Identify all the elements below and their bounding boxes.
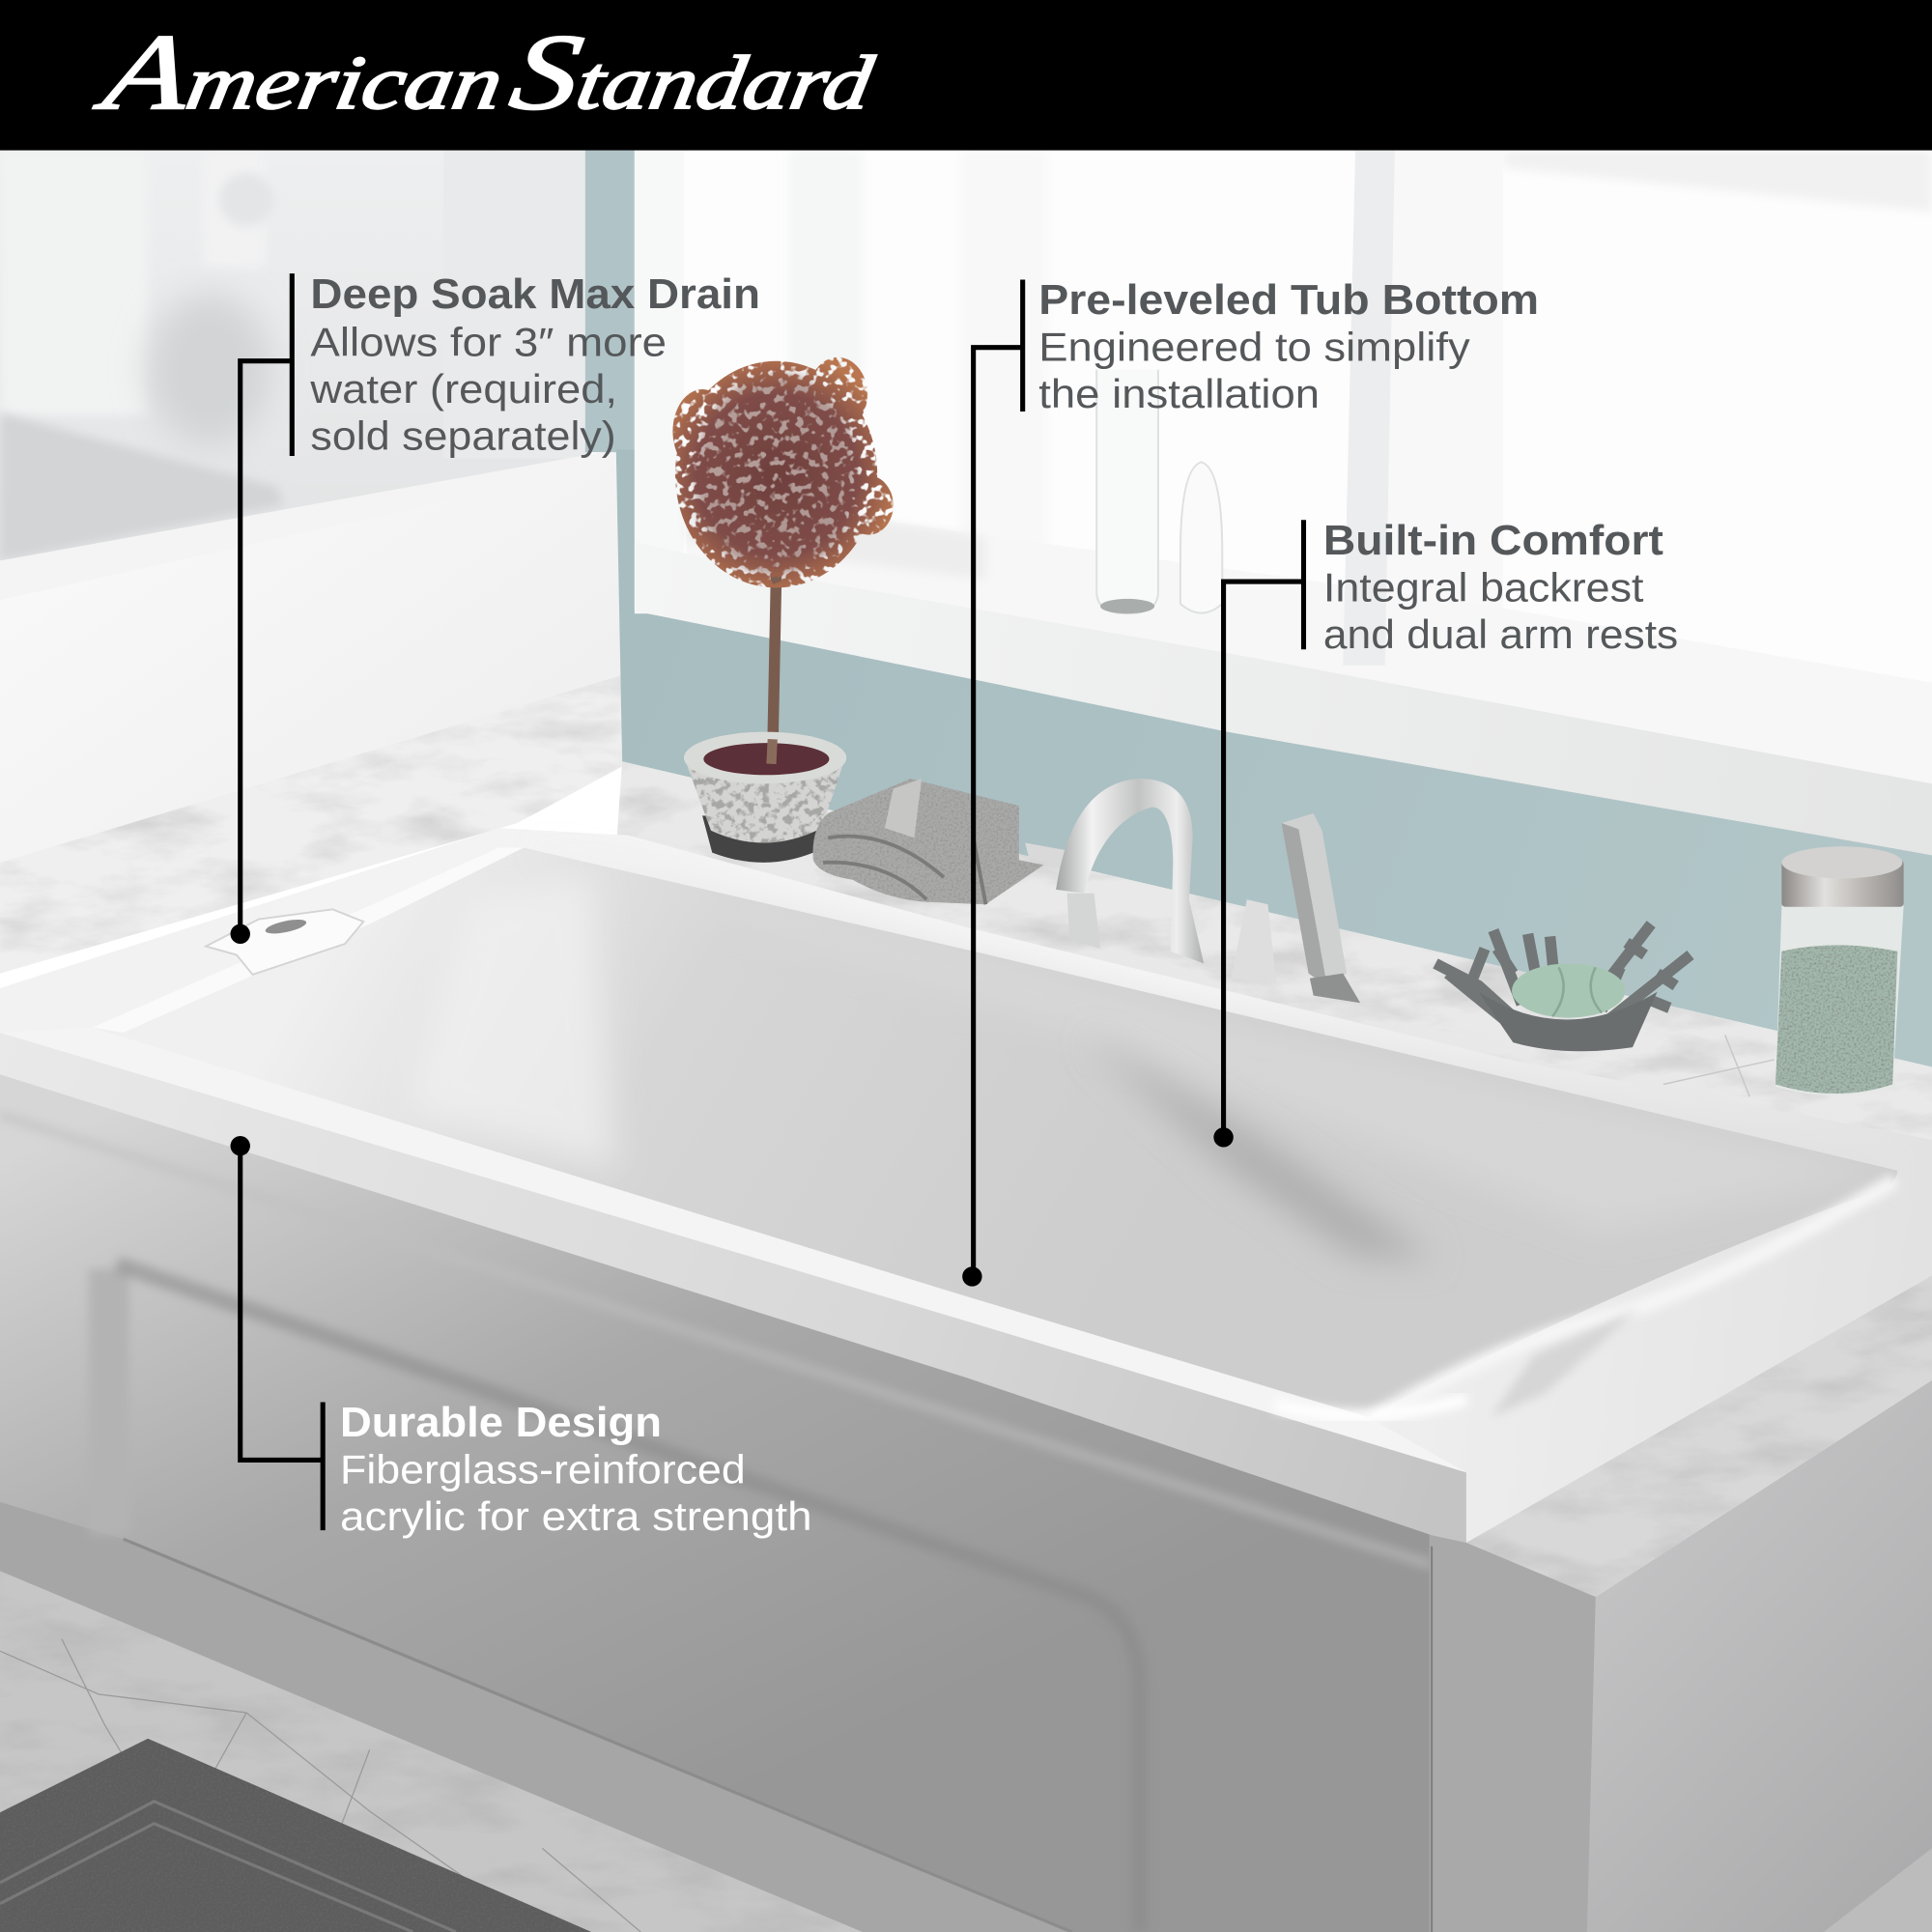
right marble top: [1466, 1275, 1932, 1597]
plant pot with topiary: [672, 357, 894, 863]
ledge: [0, 450, 616, 600]
callout text: Pre-leveled Tub Bottom: [1038, 277, 1539, 324]
callout text: acrylic for extra strength: [340, 1493, 812, 1539]
tub basin: [93, 848, 1897, 1417]
marble floor corner: [1824, 1848, 1932, 1932]
callout text: Deep Soak Max Drain: [310, 271, 760, 318]
marble deck: [616, 761, 1932, 1158]
coral soap dish: [1435, 924, 1690, 1051]
callout: Built-in Comfort: [1213, 518, 1678, 1148]
callout text: water (required,: [309, 366, 617, 412]
callout text: [1038, 277, 1539, 416]
tub rim: [0, 828, 1932, 1543]
leader line and dot: [1213, 520, 1303, 1148]
stem: [773, 573, 777, 757]
teal wall: [616, 450, 1932, 1067]
callout: Deep Soak Max Drain: [231, 271, 760, 944]
leader line and dot: [962, 280, 1023, 1287]
teal wall strip: [585, 151, 635, 452]
saucer: [702, 815, 818, 863]
tub side panel and end wall: [1430, 1380, 1932, 1932]
callout text: the installation: [1038, 371, 1320, 416]
tub rim front face: [0, 1033, 1466, 1543]
callout text: Built-in Comfort: [1323, 518, 1663, 564]
callout text: and dual arm rests: [1323, 611, 1678, 657]
bath mat: [0, 1739, 591, 1932]
callout: Pre-leveled Tub Bottom: [962, 277, 1539, 1287]
header bar: [0, 0, 1932, 151]
callout text: Engineered to simplify: [1038, 325, 1470, 370]
white tiled wall: [0, 453, 622, 868]
American Standard logo: Standard: [502, 13, 885, 132]
American Standard logo: American: [88, 13, 514, 132]
rim top highlight: [0, 1028, 1466, 1472]
callout text: Durable Design: [340, 1400, 662, 1446]
rim step by drain: [93, 848, 524, 1033]
callout: Durable Design: [231, 1136, 812, 1539]
glass bottles on sill: [1096, 370, 1222, 613]
leader line and dot: [231, 273, 292, 944]
callout text: [1323, 518, 1678, 657]
window: [635, 151, 1932, 855]
bathroom scene background: [0, 151, 1932, 1158]
drain cover: [206, 909, 363, 975]
wall mirror with blurred reflection: [0, 151, 591, 582]
folded towel: [813, 779, 1043, 904]
faucet: [1025, 779, 1204, 963]
leader line and dot: [231, 1136, 323, 1530]
pot body: [684, 732, 846, 842]
foliage: [672, 357, 894, 587]
marble backsplash: [0, 675, 622, 974]
tub apron: [0, 1072, 1432, 1932]
glass jar with bath salts: [1776, 846, 1904, 1095]
marble floor: [0, 1567, 863, 1932]
callout text: sold separately): [310, 413, 616, 459]
callout text: [309, 271, 760, 459]
callout text: [340, 1400, 812, 1539]
callout text: Integral backrest: [1323, 564, 1644, 610]
callout text: Allows for 3″ more: [310, 320, 667, 365]
American Standard logo: [88, 13, 885, 132]
deck valve and hand shower: [1231, 813, 1360, 1003]
callout text: Fiberglass-reinforced: [340, 1447, 746, 1492]
